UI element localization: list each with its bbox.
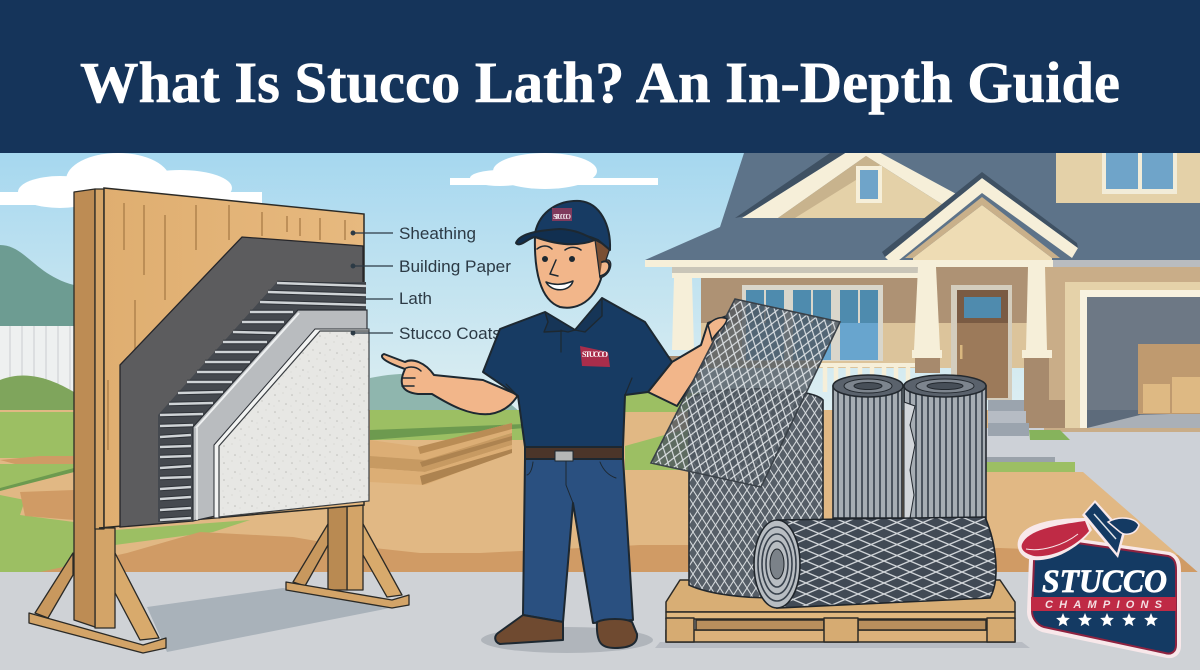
cloud: left [0,153,262,208]
layer: lath [158,282,366,522]
upright roll: right [904,375,986,520]
label: Sheathing: Sheathing [399,225,476,243]
cap logo [552,208,572,221]
right arm holding sheet [648,316,728,406]
stand: right support [286,500,409,608]
belt [525,447,623,461]
door [951,285,1012,400]
cap [516,201,610,250]
driveway [985,428,1200,574]
upper gable [735,150,960,218]
porch steps [988,400,1029,436]
logo band [1031,597,1176,611]
porch windows [742,285,883,361]
fence [0,326,74,398]
green patch [1029,430,1070,440]
background scene [0,150,1200,670]
column bases [668,356,1049,428]
porch railing [820,363,916,392]
label: Stucco Coats: Stucco Coats [399,325,501,343]
worker figure [382,201,728,653]
ground shadow [147,588,390,652]
cap logo: STUCCO [553,213,572,221]
polo shirt [483,298,672,447]
pallet [655,580,1030,648]
upper wall [1056,153,1200,203]
wall section cutaway [99,188,369,528]
shirt logo [580,346,610,367]
upper window [1102,153,1177,194]
boots [495,615,637,648]
header band [0,0,1200,153]
stacked lumber [370,423,512,485]
bushes [0,376,74,420]
darker dirt [0,456,1200,574]
grass edge [0,424,525,491]
shadow under worker [481,627,653,653]
front gable [882,172,1078,268]
mesh roll: tall [689,389,823,598]
hand over sheet [708,318,727,340]
roof [645,153,1200,260]
brand logo [1018,500,1180,657]
layer: base coat [193,310,367,521]
lath sheet held up [651,299,840,487]
label: Building Paper: Building Paper [399,258,512,276]
logo subtitle: CHAMPIONS [1045,599,1163,611]
layer: stucco finish [214,329,369,518]
hills [0,245,700,412]
sidewalk [0,572,1200,670]
house [645,150,1200,440]
left arm pointing [382,354,518,414]
logo shield inner [1032,537,1176,654]
shirt logo: STUCCO [582,350,608,359]
dirt ground [0,410,1200,574]
upright roll: left [833,375,903,518]
logo shield [1028,533,1180,657]
label: Lath: Lath [399,290,432,308]
logo trowel [1082,500,1139,558]
grass [0,393,700,572]
horizontal mesh roll [754,517,996,608]
walls [701,267,1200,432]
eave [645,260,1200,278]
materials on pallet [651,299,1030,648]
head [535,233,611,308]
label leaders [351,231,393,335]
layer: sheathing [99,188,364,528]
logo wordmark: STUCCO [1042,564,1167,600]
layer: building paper [120,237,363,527]
logo swoosh [1018,518,1092,560]
stand: left support and post [29,189,166,653]
cloud: center [450,153,658,189]
garage [1065,282,1200,428]
columns [672,267,1052,358]
logo stars [1056,613,1158,626]
trousers [523,458,633,623]
title: What Is Stucco Lath? An In-Depth Guide [80,50,1120,115]
